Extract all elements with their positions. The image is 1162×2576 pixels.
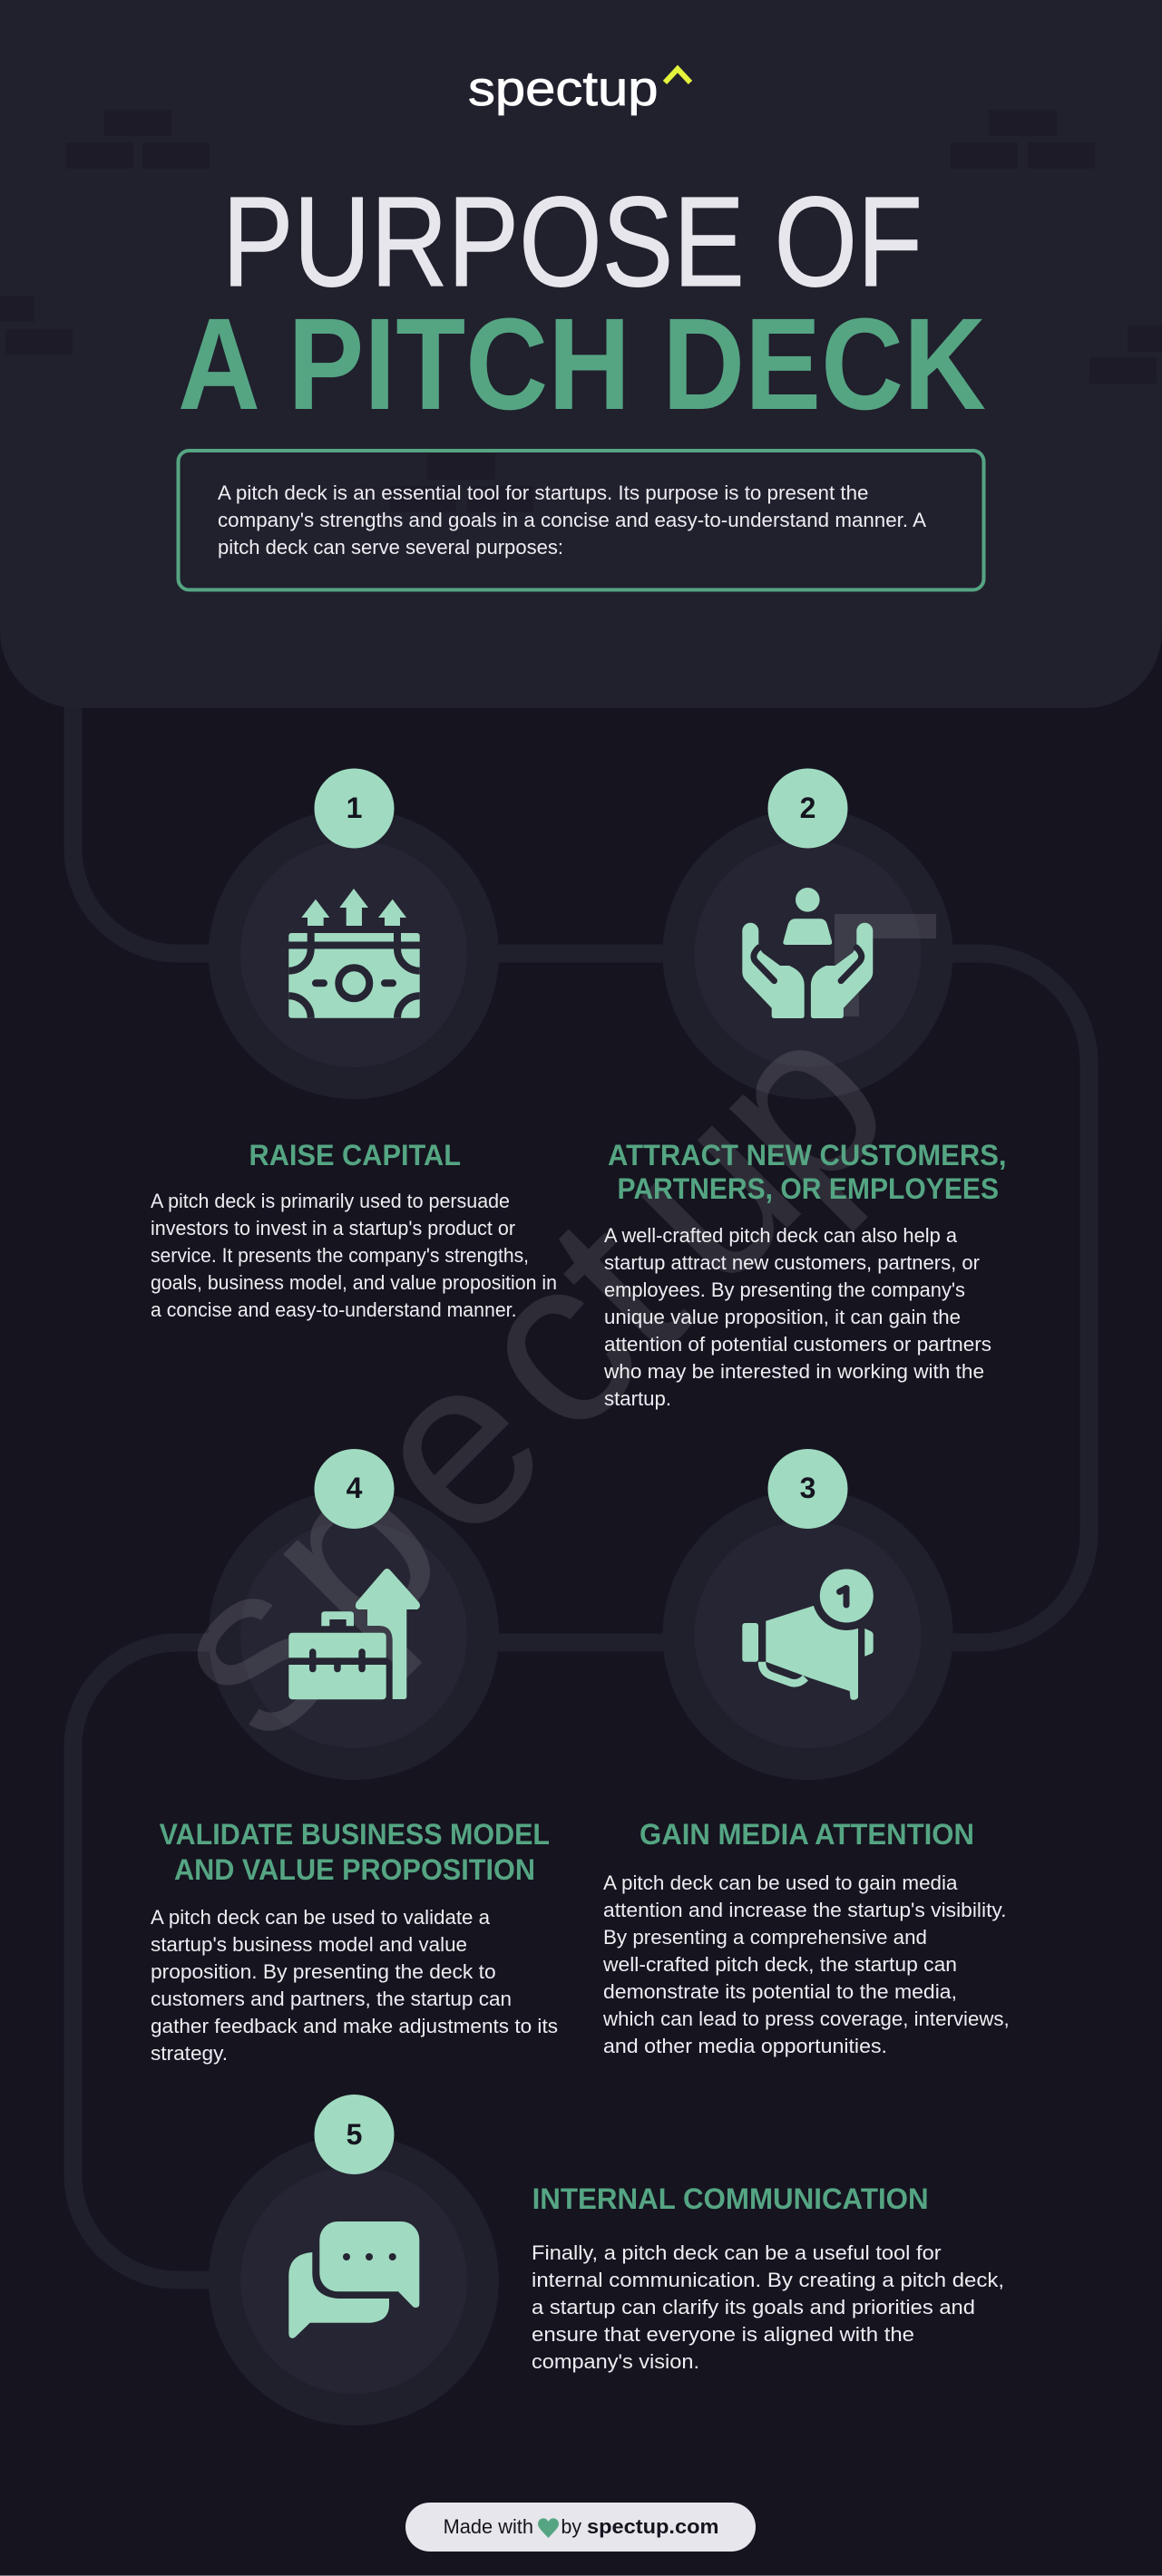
description: unique value proposition, it can gain the bbox=[604, 1306, 961, 1328]
description: company's vision. bbox=[532, 2350, 699, 2373]
description: startup. bbox=[604, 1387, 671, 1410]
description: demonstrate its potential to the media, bbox=[603, 1980, 957, 2003]
header panel bbox=[0, 0, 1162, 708]
description bbox=[603, 1224, 991, 1410]
badge 5: 5 bbox=[347, 2118, 362, 2151]
description: startup's business model and value bbox=[151, 1933, 467, 1956]
badge 4: 4 bbox=[347, 1472, 363, 1504]
heading: PARTNERS, OR EMPLOYEES bbox=[617, 1172, 999, 1205]
description: ensure that everyone is aligned with the bbox=[532, 2323, 914, 2346]
title bbox=[178, 170, 986, 437]
heading bbox=[608, 1139, 1007, 1205]
description: and other media opportunities. bbox=[603, 2035, 887, 2057]
description: service. It presents the company's strengths, bbox=[151, 1244, 529, 1267]
step circles bbox=[209, 809, 952, 2425]
badge 2: 2 bbox=[800, 792, 815, 824]
badge 4 bbox=[314, 1449, 394, 1529]
watermark: spectup: spectup bbox=[112, 963, 937, 1787]
icon: megaphone bbox=[742, 1561, 881, 1700]
description: well-crafted pitch deck, the startup can bbox=[602, 1953, 957, 1976]
description bbox=[151, 1190, 557, 1321]
intro text box: A pitch deck is an essential tool for startups. Its purpose is to present the bbox=[218, 481, 869, 504]
heading: AND VALUE PROPOSITION bbox=[174, 1853, 535, 1886]
intro text box: company's strengths and goals in a concise and easy-to-understand manner. A bbox=[218, 509, 926, 531]
footer pill: spectup.com bbox=[587, 2515, 718, 2538]
step 5: internal communication bbox=[288, 2095, 1004, 2373]
intro text box: pitch deck can serve several purposes: bbox=[218, 536, 563, 559]
description: A pitch deck is primarily used to persuade bbox=[151, 1190, 510, 1212]
heading: VALIDATE BUSINESS MODEL bbox=[160, 1818, 550, 1851]
intro text box bbox=[178, 451, 983, 589]
title: PURPOSE OF bbox=[222, 170, 923, 313]
icon: chat bubbles bbox=[288, 2221, 419, 2338]
description: goals, business model, and value proposition in bbox=[151, 1271, 557, 1294]
badge 1: 1 bbox=[347, 792, 362, 824]
description bbox=[151, 1906, 558, 2065]
badge 5 bbox=[314, 2095, 394, 2174]
footer pill: by bbox=[561, 2515, 581, 2538]
step 4: validate business model bbox=[151, 1449, 558, 2065]
icon: briefcase with arrow bbox=[288, 1569, 420, 1699]
description: a startup can clarify its goals and priorities and bbox=[532, 2296, 975, 2318]
footer pill bbox=[405, 2503, 756, 2552]
description: startup attract new customers, partners, or bbox=[604, 1251, 980, 1274]
step 1: raise capital bbox=[151, 769, 557, 1321]
description: internal communication. By creating a pitch deck, bbox=[532, 2269, 1004, 2291]
heading: GAIN MEDIA ATTENTION bbox=[640, 1818, 974, 1851]
description: gather feedback and make adjustments to its bbox=[151, 2015, 558, 2037]
description bbox=[602, 1871, 1010, 2057]
description: A well-crafted pitch deck can also help a bbox=[604, 1224, 958, 1247]
description: a concise and easy-to-understand manner. bbox=[151, 1298, 517, 1321]
badge 2 bbox=[767, 769, 847, 849]
description: customers and partners, the startup can bbox=[151, 1988, 512, 2010]
logo: spectup bbox=[468, 62, 659, 116]
icon: money with arrows bbox=[288, 889, 420, 1018]
heading bbox=[160, 1818, 550, 1886]
description: who may be interested in working with the bbox=[603, 1360, 984, 1383]
heading: INTERNAL COMMUNICATION bbox=[532, 2182, 929, 2215]
connector path through the steps bbox=[73, 689, 1089, 2280]
title: A PITCH DECK bbox=[178, 291, 986, 437]
description: attention and increase the startup's visibility. bbox=[603, 1899, 1007, 1921]
description: attention of potential customers or partners bbox=[604, 1333, 991, 1356]
description bbox=[532, 2241, 1004, 2373]
description: A pitch deck can be used to validate a bbox=[151, 1906, 491, 1929]
description: Finally, a pitch deck can be a useful tool for bbox=[532, 2241, 942, 2264]
step 3: gain media attention bbox=[602, 1449, 1010, 2057]
heading: ATTRACT NEW CUSTOMERS, bbox=[608, 1139, 1007, 1171]
description: proposition. By presenting the deck to bbox=[151, 1960, 496, 1983]
step 2: attract new customers bbox=[603, 769, 1007, 1410]
icon: heart bbox=[538, 2518, 559, 2538]
badge 3: 3 bbox=[800, 1472, 815, 1504]
icon: hands holding person bbox=[742, 888, 873, 1018]
description: which can lead to press coverage, interviews, bbox=[602, 2007, 1010, 2030]
description: A pitch deck can be used to gain media bbox=[603, 1871, 958, 1894]
heading: RAISE CAPITAL bbox=[249, 1139, 461, 1171]
description: investors to invest in a startup's product or bbox=[151, 1217, 515, 1239]
footer pill: Made with bbox=[444, 2515, 533, 2538]
description: strategy. bbox=[151, 2042, 228, 2065]
description: By presenting a comprehensive and bbox=[603, 1926, 927, 1949]
badge 3 bbox=[767, 1449, 847, 1529]
badge 1 bbox=[314, 769, 394, 849]
description: employees. By presenting the company's bbox=[604, 1278, 965, 1301]
